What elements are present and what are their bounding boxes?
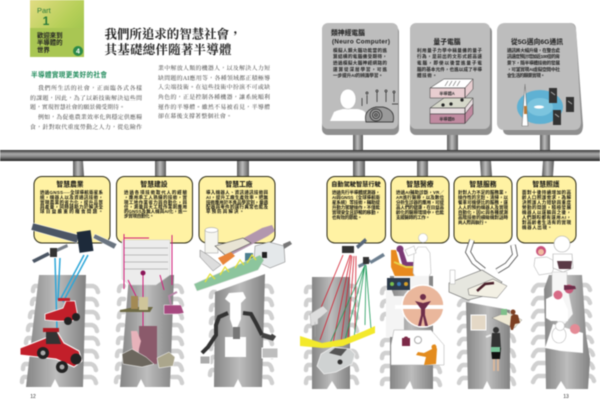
sign: quantum computer: 體技術。 xyxy=(417,72,437,79)
sign: quantum computer: 量子電腦 xyxy=(433,37,461,46)
panel: smart services: 餐車可機便比的服務，運 xyxy=(458,199,508,206)
panel: smart care: 對高齡者生活有的實現 xyxy=(522,219,572,226)
panel: smart services: 自動化，因IC與各種感測 xyxy=(458,209,508,216)
ground machines xyxy=(122,349,154,367)
part header block: 半導體的 xyxy=(37,38,63,46)
panel: smart services: 針對人力不足的服務業， xyxy=(458,189,508,196)
sign: 5G to 6G: 景下，隨半導體技術的發展 xyxy=(507,60,560,66)
panel: smart services: 高階技術的細緻機對話時 xyxy=(458,214,508,221)
icon: satellites, signal lines and car xyxy=(300,238,385,374)
panel: smart healthcare: 支援醫師的工作。 xyxy=(396,214,430,221)
panel: smart construction: 現工地作業省力與自動化，與 xyxy=(124,199,188,206)
panel: autonomous driving: 星系統）等技術，輔助提 xyxy=(332,199,380,206)
icon: signal area and phones xyxy=(517,84,574,126)
small satellite xyxy=(358,253,385,268)
crane frame and building xyxy=(122,240,170,285)
panel: smart services: 操作性的烹飪、清掃，以 xyxy=(458,194,508,201)
sign: quantum computer xyxy=(410,23,492,135)
nurse xyxy=(534,246,556,275)
sign: neuro computer xyxy=(322,23,399,135)
MRI white column xyxy=(386,276,429,363)
panel: smart healthcare: 透過AI輔助診斷，VR／ xyxy=(396,189,444,196)
green conveyor belt xyxy=(194,255,264,291)
panel: smart services: 尚人際與執行。 xyxy=(458,219,488,226)
standing woman xyxy=(486,327,501,371)
section heading: 半導體實現更美好的社會 xyxy=(31,70,107,79)
small satellite xyxy=(32,244,68,263)
icon: satellites, beams and tractors xyxy=(20,223,117,373)
title xyxy=(104,26,242,57)
page number right: 13 xyxy=(563,394,569,400)
large satellite xyxy=(31,223,117,253)
panel: smart factory: 技術應用於不良品學習別，量適 xyxy=(206,199,268,206)
shelf with boxes xyxy=(120,296,153,312)
part header block: Part xyxy=(37,6,52,15)
panel: autonomous driving: AI與GNSS（全球導航衛 xyxy=(332,194,380,201)
robot column xyxy=(552,272,573,324)
body text right column: 運作的半導體。雖然不易被看見，半導體 xyxy=(158,103,270,111)
icon: neural network xyxy=(362,90,398,122)
panel: smart construction xyxy=(116,176,192,243)
refrigerator block xyxy=(139,326,157,364)
body text left column: 例如，為促進農業效率化與穩定供應糧 xyxy=(38,113,142,121)
panel: smart agriculture xyxy=(34,176,110,243)
robot arms xyxy=(468,240,515,271)
body text left column: 我們所生活的社會，正面臨各式各樣 xyxy=(38,84,142,92)
bear robot xyxy=(553,236,573,272)
panel: smart healthcare: 齡化的醫療環境中，也能 xyxy=(396,209,444,216)
desk with customer xyxy=(492,309,522,330)
panel: autonomous driving: 實現安全且舒暢的移動， xyxy=(332,209,380,216)
chip 6 xyxy=(459,300,514,389)
sign: neuro computer: 透過模擬大腦神經網路的 xyxy=(333,60,387,66)
panel: smart care xyxy=(517,176,576,243)
panel: smart care: 齡人口照護需求，為解 xyxy=(522,194,572,201)
platform xyxy=(200,250,221,271)
panel: smart factory: 早預防與解決。 xyxy=(206,208,244,215)
panel: smart services: 人人的預約機器人及實現 xyxy=(458,204,508,211)
panel: smart healthcare: 分析生診器的應用，可提 xyxy=(396,199,444,206)
conveyor band xyxy=(222,225,275,258)
chip 3 xyxy=(210,274,272,387)
panel: smart construction: ，應用承工人熟練的技術，實 xyxy=(124,194,188,201)
panel: smart agriculture: 智慧農業 xyxy=(56,180,84,188)
title: 其基礎總伴隨著半導體 xyxy=(104,42,232,57)
panel: smart construction: 的GNSS及無人機與AI化，進一 xyxy=(124,208,188,215)
body text right column: 業中解放人類的機器人，以及解決人力短 xyxy=(158,64,270,72)
outlined doctor figure xyxy=(405,234,431,278)
icon: factory line and robot xyxy=(194,225,292,364)
vertical posts lower xyxy=(73,161,554,176)
part header block: 歡迎來到 xyxy=(37,30,63,40)
sign: 5G to 6G: 從5G邁向6G通訊 xyxy=(511,37,563,46)
sign: 5G to 6G xyxy=(497,23,583,135)
chip 4 xyxy=(306,277,357,389)
sign: 5G to 6G: 通訊將大幅升級，在整合處 xyxy=(507,47,560,54)
body text left column: 的課題，因此，為了以新技術解決這些問 xyxy=(30,94,142,102)
panel: smart factory: 智慧工廠 xyxy=(225,180,253,188)
chips with pins xyxy=(22,274,594,389)
panel: smart construction: 任，測量與大工程作業則應用 xyxy=(124,204,188,210)
sign: neuro computer: 算結構的電腦備受期待， xyxy=(333,53,387,60)
panel: smart healthcare: 高人們的健康，在日益高 xyxy=(396,204,444,211)
sign posts upper xyxy=(353,132,550,150)
body text right column: 缺問題的AI應用等，各種領域都正積極導 xyxy=(158,74,270,82)
yellow road xyxy=(300,326,375,348)
body text left column xyxy=(30,84,142,131)
kitchen counter xyxy=(449,270,502,300)
page number left: 12 xyxy=(30,394,36,400)
sign: 5G to 6G: 訊速度預計增加近100倍的背 xyxy=(507,53,560,60)
cyan beams xyxy=(55,255,88,330)
magenta robot xyxy=(164,292,184,314)
panel: smart factory: AI，提升工廠生產效率。把無 xyxy=(206,194,268,201)
large tractor xyxy=(20,328,82,373)
chef xyxy=(450,270,455,284)
MRI scanner circle xyxy=(395,285,445,327)
panel: smart agriculture: 球日益嚴重的糧食問題。 xyxy=(40,208,103,215)
icon: hospital scene xyxy=(386,234,445,365)
inspection machine xyxy=(254,242,285,268)
upper bed xyxy=(546,284,576,321)
icon: service robots and people xyxy=(449,240,522,371)
trays xyxy=(215,238,251,255)
panel: smart agriculture: 與產量，同時藉助力於解決全 xyxy=(40,204,104,210)
worker figure xyxy=(131,331,141,359)
icon: care robots and beds xyxy=(534,236,583,353)
small tractor xyxy=(45,298,80,325)
panel: smart services: 智慧服務 xyxy=(469,180,497,188)
panel: smart healthcare: AR進行醫療，以及數位 xyxy=(396,194,444,201)
body text right column xyxy=(158,64,270,120)
horizontal main pipe xyxy=(0,150,600,161)
cylinder xyxy=(205,228,218,253)
panel: smart care: 勞動的問題，積極發展 xyxy=(522,204,572,211)
sign: neuro computer: 運算從深層學習，可進 xyxy=(333,66,387,73)
sign: quantum computer: 腦的基本元件，也進以成了半導 xyxy=(417,66,482,73)
body text left column: 題，實現智慧社會的願景備受期待。 xyxy=(30,103,125,111)
panel: autonomous driving: 透過先行半導體感測器， xyxy=(332,189,380,196)
orange chair with patient xyxy=(391,246,419,279)
part header block: 4 xyxy=(76,48,80,56)
signal lines xyxy=(320,255,356,343)
panel: autonomous driving xyxy=(327,176,386,243)
panel: autonomous driving: 升動力駕駛操作，不僅能 xyxy=(332,204,380,211)
sign: quantum computer: 電腦，即使以後當進量子電 xyxy=(417,60,482,66)
large satellite xyxy=(342,238,367,253)
sign: quantum computer: 半導體A xyxy=(439,90,455,97)
sign: 5G to 6G: ，可望實現AI虛擬空間中社 xyxy=(507,66,560,73)
panel: autonomous driving: 自動駕駛智慧行駛 xyxy=(331,180,382,188)
panel: smart services xyxy=(454,176,512,243)
sign: quantum computer: 利用量子力學中稱量備的量子 xyxy=(417,47,482,54)
sign: neuro computer: 模擬人類大腦功能當的進 xyxy=(333,47,387,54)
part header block xyxy=(30,0,84,57)
icon: construction building and robots xyxy=(120,234,184,368)
white bay with seated figure xyxy=(391,330,444,365)
body text right column: 卻在幕後支撐著整個社會。 xyxy=(158,112,232,120)
body text left column: 食，針對取代重度勞動之人力，從危險作 xyxy=(30,123,142,131)
part header block: 1 xyxy=(43,14,50,28)
sign: quantum computer: 行為，是前出的文形式超高速 xyxy=(417,53,482,60)
panel: smart agriculture: 透過GNSS──全球導航衛星系 xyxy=(40,189,104,196)
icon: human head xyxy=(330,89,369,121)
chip 1 xyxy=(22,275,98,387)
panel: smart factory xyxy=(199,176,275,243)
panel: smart factory: 導入機器人、資訊通訊技術與 xyxy=(206,189,268,196)
body text right column: 角色的，正是控制各種機器，讓系統順利 xyxy=(158,93,270,101)
part header block: 世界 xyxy=(37,45,50,54)
panel: smart construction: 智慧建設 xyxy=(140,180,168,188)
sign: neuro computer: 一步提升AI的辨識學習。 xyxy=(333,72,383,79)
car xyxy=(317,347,355,374)
panel: smart agriculture: 統，機器人以及資通訊技術， xyxy=(40,194,103,201)
panel: smart care: 機器人出現。 xyxy=(522,224,552,231)
panel: smart agriculture: 實現農業的省力化，提升品質 xyxy=(40,199,104,206)
panel: smart construction: 透過各項技術取代人的經驗 xyxy=(124,189,188,196)
white robot xyxy=(200,292,278,364)
panel: smart care: 人們期盼都有運用AI， xyxy=(522,214,571,221)
panel: autonomous driving: 也有效的節能。 xyxy=(332,214,362,221)
chip 2 xyxy=(116,275,182,387)
icon: stacked semiconductor chips xyxy=(430,79,473,124)
menu on chip xyxy=(471,315,486,330)
sign: 5G to 6G: 會生活的願景實現。 xyxy=(507,72,545,79)
lower bed xyxy=(545,322,583,353)
sign: neuro computer: (Neuro Computer) xyxy=(332,38,390,46)
panel: smart factory: 配器與零件的運行異常也能及 xyxy=(206,204,268,210)
panel: smart healthcare: 智慧醫療 xyxy=(406,180,434,188)
chip 5 xyxy=(382,276,440,389)
chip 7 xyxy=(533,275,594,389)
sign: quantum computer: 半導體B xyxy=(439,116,455,122)
orange workpiece xyxy=(218,252,235,265)
panel: smart healthcare xyxy=(391,176,449,243)
panel: smart care: 機器人以運輸與之後， xyxy=(522,209,571,216)
monitor xyxy=(387,278,410,290)
title: 我們所追求的智慧社會， xyxy=(104,26,242,42)
panel: smart care: 智慧照護 xyxy=(532,180,560,188)
panel: smart construction: 步實現自動化。 xyxy=(124,212,154,220)
panel: smart care: 決照護人力短缺與重度 xyxy=(522,199,572,206)
satellite dish xyxy=(310,306,328,337)
sign: neuro computer: 類神經電腦 xyxy=(331,28,365,37)
body text right column: 入尖端技術。在這些技術中扮演不可或缺 xyxy=(158,83,270,91)
panel: smart care: 面對十後持續增加的高 xyxy=(522,189,572,196)
